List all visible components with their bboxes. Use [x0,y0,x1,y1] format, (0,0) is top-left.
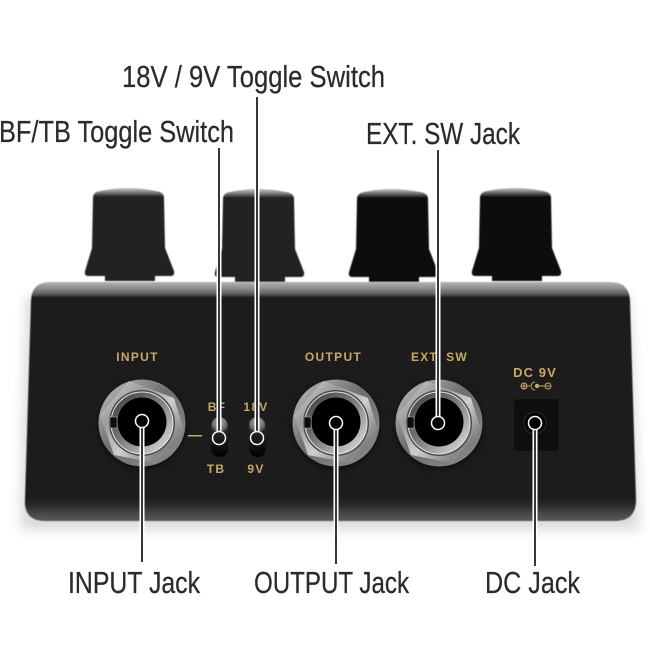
leader: dc [528,416,542,566]
panel labels: OUTPUT [305,350,362,364]
panel labels: BF [208,400,226,414]
dc jack socket [514,399,559,451]
leader: output [330,416,342,564]
panel labels: EXT. SW [411,350,468,364]
knob 3 [349,189,438,282]
knob 1 [85,188,174,281]
input jack [98,380,186,469]
callout: OUTPUT Jack: OUTPUT Jack [254,565,409,600]
callout: DC Jack: DC Jack [485,565,580,600]
polarity symbol [521,382,551,390]
ext sw jack [395,380,483,469]
leader: input [136,414,148,562]
bf/tb toggle switch [211,417,228,457]
callout: INPUT Jack: INPUT Jack [68,565,200,600]
leader: bf/tb [212,148,226,444]
pedal body [25,282,636,521]
callout: 18V / 9V Toggle Switch: 18V / 9V Toggle Switch [122,59,385,94]
output jack [292,380,380,469]
leader: 18v/9v [250,97,264,444]
knob 4 [472,188,561,281]
panel labels [116,350,557,476]
18v/9v toggle switch [249,417,266,457]
panel labels: DC 9V [513,365,557,380]
knob 2 [215,189,304,282]
callout: EXT. SW Jack: EXT. SW Jack [366,116,520,151]
callout: BF/TB Toggle Switch: BF/TB Toggle Switch [0,114,234,149]
leader: ext sw [432,150,444,430]
panel labels: TB [207,462,225,476]
panel labels: INPUT [116,350,159,364]
panel labels: 9V [247,462,265,476]
panel labels: 18V [243,400,269,414]
dash mark [188,435,202,436]
body shadow [20,296,640,530]
